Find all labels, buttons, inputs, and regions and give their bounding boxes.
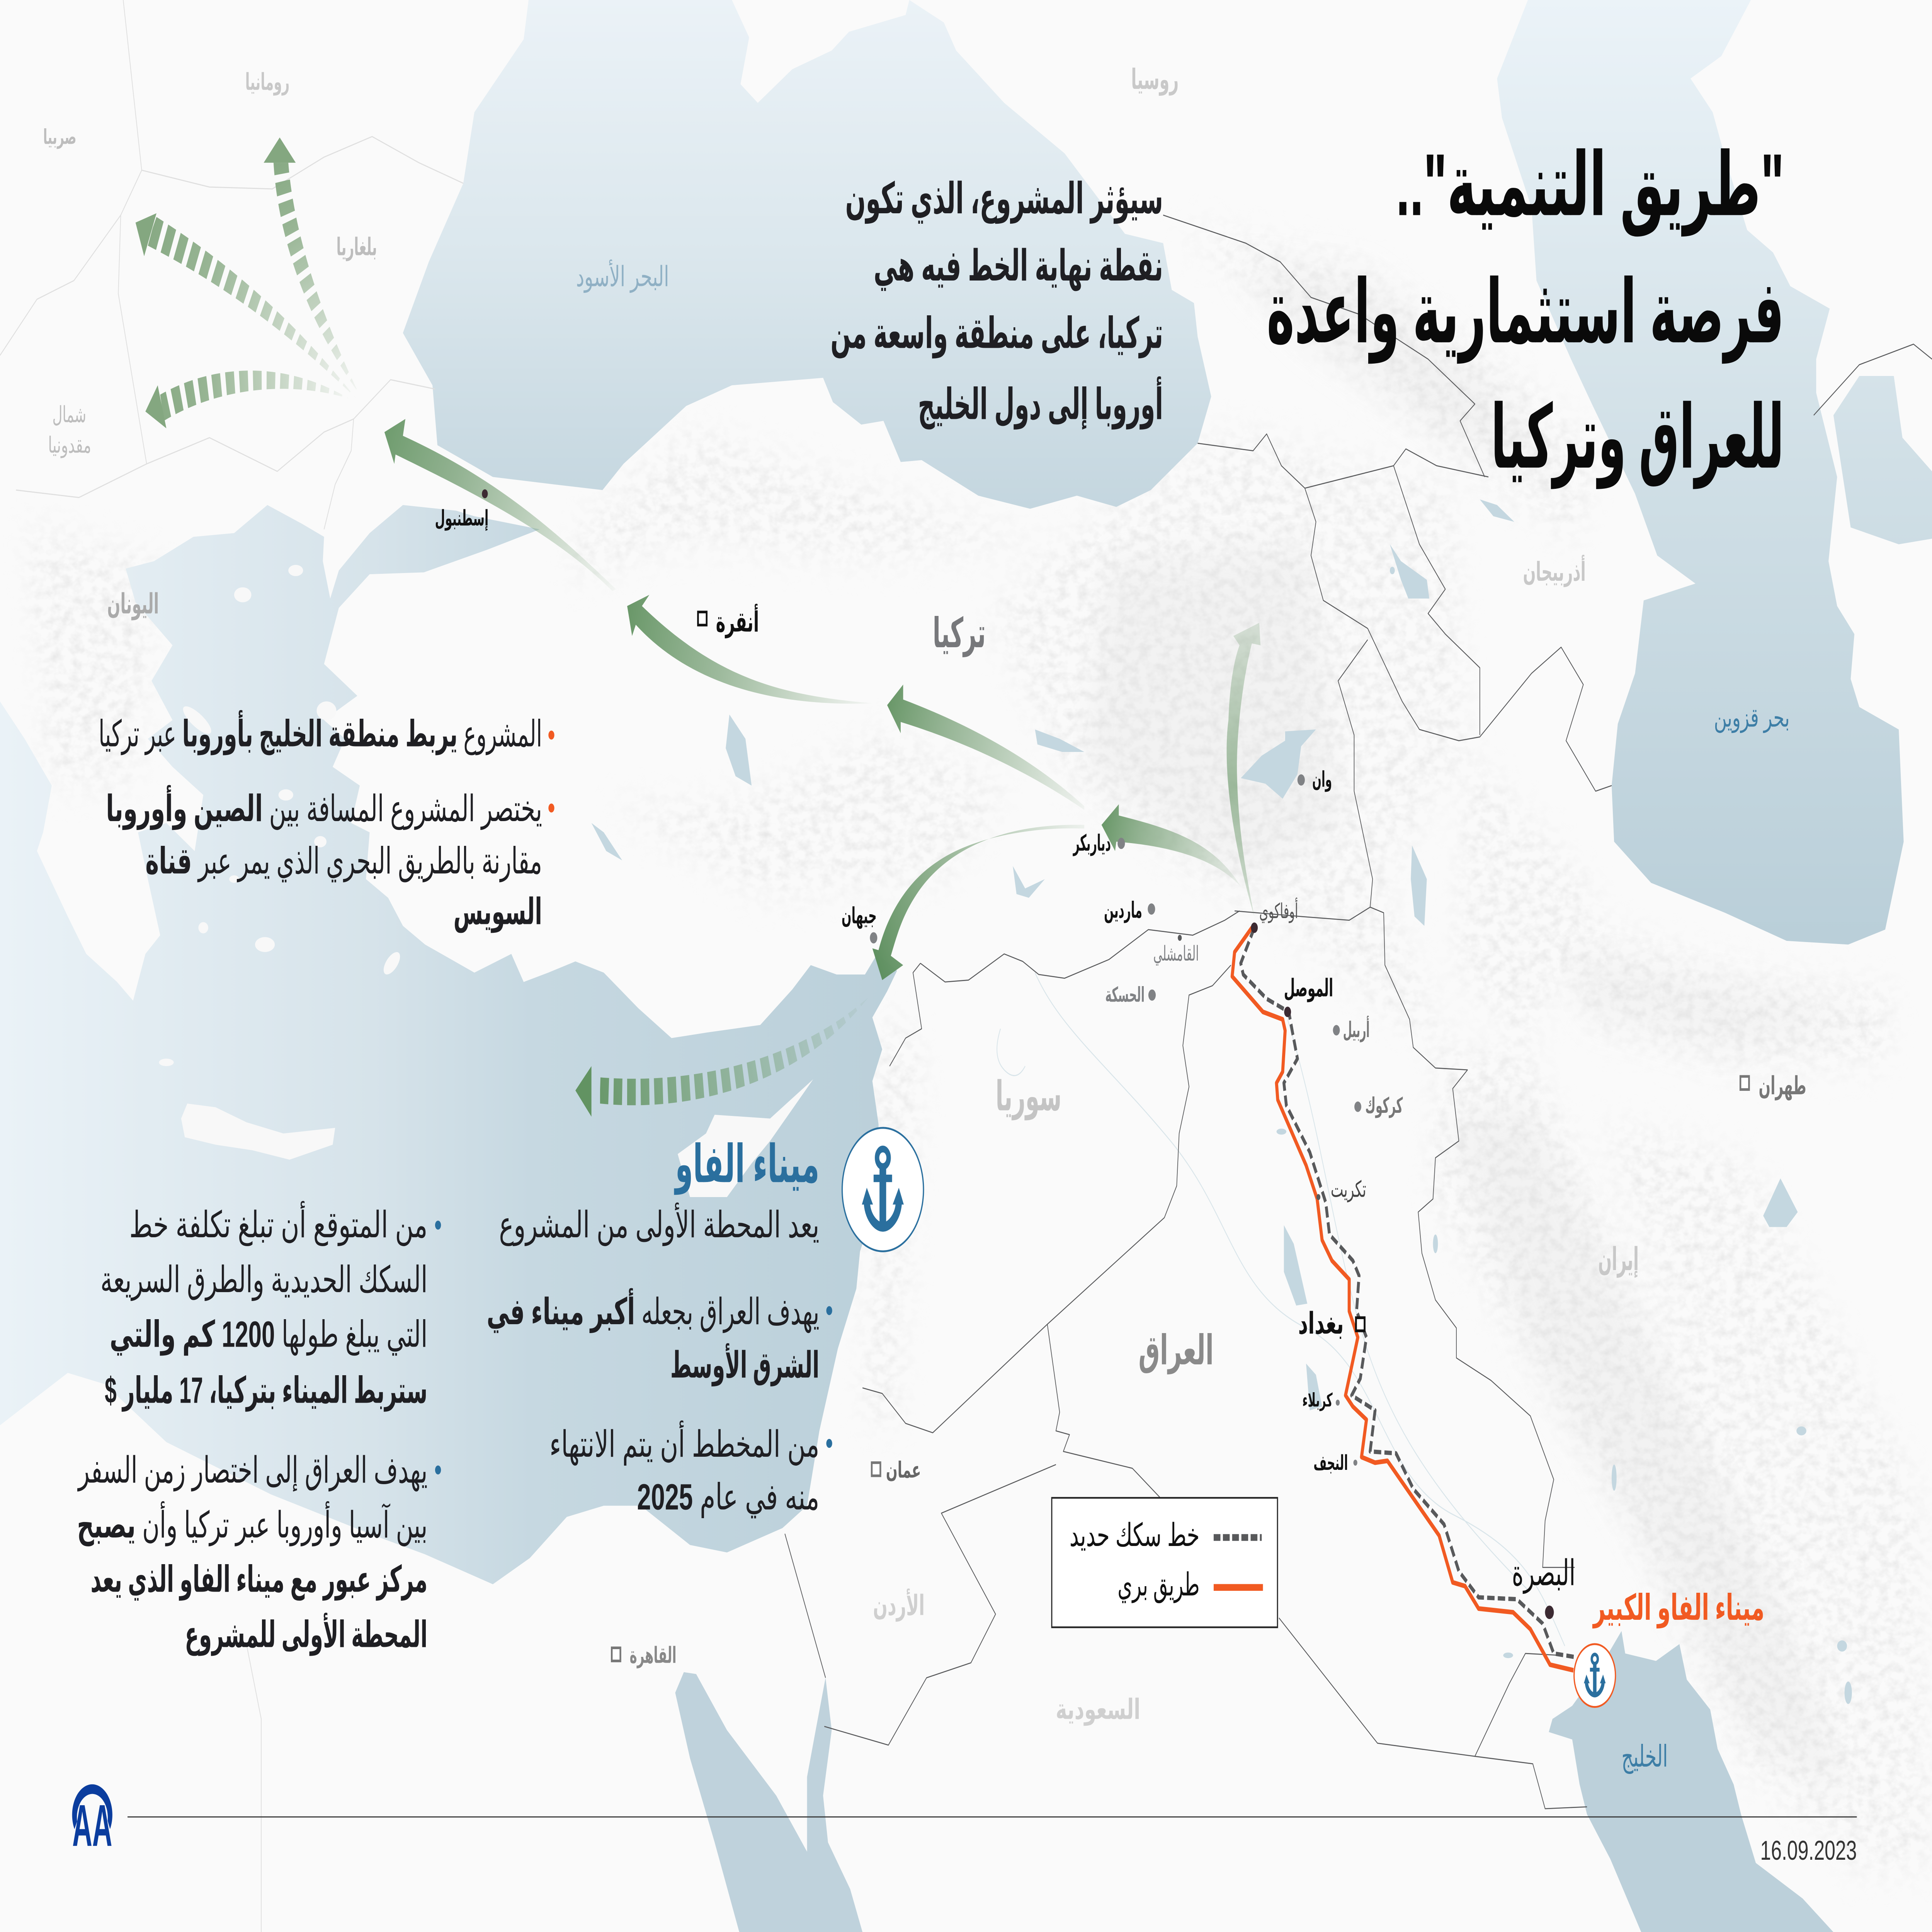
label: Iraq: العراق bbox=[1138, 1328, 1214, 1374]
text block: Europe link bullets: المشروع يربط منطقة الخليج بأوروبا عبر تركيا bbox=[99, 710, 542, 755]
city: Mardin: ماردين bbox=[1104, 898, 1142, 923]
label: North Macedonia: شمال bbox=[53, 402, 86, 427]
city: Istanbul bbox=[435, 489, 488, 531]
text block: cost and transit bullets: ستربط الميناء بتركيا، 17 مليار $ bbox=[105, 1370, 428, 1412]
sea: Persian Gulf bbox=[1549, 1631, 1833, 1932]
city: Mosul bbox=[1284, 975, 1333, 1017]
date: 16.09.2023 bbox=[1760, 1835, 1857, 1866]
label: Greece: اليونان bbox=[107, 588, 159, 620]
arrow: Ovakoy to north bbox=[1227, 623, 1260, 917]
text block: Europe link bullets: السويس bbox=[453, 891, 542, 933]
text block: Faw port facts: يهدف العراق بجعله أكبر ميناء في bbox=[487, 1288, 820, 1333]
text block: Turkey impact: نقطة نهاية الخط فيه هي bbox=[874, 242, 1163, 291]
footer rule bbox=[128, 1816, 1857, 1817]
arrow: to North Macedonia bbox=[145, 371, 349, 429]
city: Amman: عمان bbox=[886, 1458, 921, 1483]
heading: Faw port: ميناء الفاو bbox=[674, 1135, 820, 1196]
city: Amman bbox=[872, 1458, 921, 1483]
text block: cost and transit bullets bbox=[77, 1201, 441, 1656]
label: Saudi Arabia: السعودية bbox=[1056, 1694, 1140, 1726]
city: Kirkuk: كركوك bbox=[1365, 1093, 1403, 1118]
city: Tikrit bbox=[1316, 1177, 1366, 1202]
city: Erbil: أربيل bbox=[1343, 1016, 1370, 1042]
city: Istanbul: إسطنبول bbox=[435, 506, 488, 531]
text block: cost and transit bullets: التي يبلغ طولها 1200 كم والتي bbox=[110, 1314, 428, 1356]
arrow: Diyarbakir to Ceyhan bbox=[872, 825, 1084, 980]
label: Romania: رومانيا bbox=[245, 69, 289, 96]
legend: road: طريق بري bbox=[1117, 1567, 1200, 1603]
sea: Caspian bbox=[1497, 0, 1932, 945]
logo: Anadolu Agency bbox=[72, 1784, 112, 1859]
sea: Mediterranean bbox=[0, 505, 897, 1584]
island: Cyprus bbox=[678, 1079, 813, 1197]
label: Azerbaijan: أذربيجان bbox=[1523, 555, 1586, 587]
city: Cairo: القاهرة bbox=[629, 1643, 677, 1668]
text block: cost and transit bullets: من المتوقع أن تبلغ تكلفة خط bbox=[129, 1201, 428, 1247]
logo: Anadolu Agency: AA bbox=[72, 1793, 112, 1859]
city: Basra: البصرة bbox=[1512, 1553, 1575, 1594]
label: Syria: سوريا bbox=[996, 1073, 1061, 1120]
text block: Faw port facts: الشرق الأوسط bbox=[670, 1343, 820, 1387]
label: Serbia: صربيا bbox=[43, 125, 77, 149]
city: Najaf: النجف bbox=[1313, 1451, 1348, 1475]
title bbox=[1267, 136, 1784, 489]
text block: Turkey impact bbox=[830, 174, 1163, 429]
city: Ovakoy: أوفاكوي bbox=[1259, 898, 1298, 923]
icon: Faw port anchor bbox=[842, 1128, 923, 1251]
city: Ankara: أنقرة bbox=[716, 604, 759, 638]
label: North Macedonia: مقدونيا bbox=[48, 432, 91, 458]
city: Tikrit: تكريت bbox=[1331, 1177, 1366, 1202]
railway route line bbox=[1241, 928, 1576, 1657]
city: Baghdad: بغداد bbox=[1298, 1307, 1344, 1340]
title: للعراق وتركيا bbox=[1491, 388, 1784, 489]
city: Van bbox=[1298, 767, 1332, 792]
label: Gulf: الخليج bbox=[1621, 1740, 1668, 1774]
label: Jordan: الأردن bbox=[873, 1588, 925, 1622]
city: Tehran: طهران bbox=[1759, 1071, 1806, 1100]
arrow: central Turkey to Ankara bbox=[627, 595, 872, 704]
text block: Faw port facts: من المخطط أن يتم الانتهاء bbox=[549, 1420, 820, 1466]
icon: small Faw port anchor bbox=[1574, 1644, 1616, 1707]
city: Mosul: الموصل bbox=[1284, 975, 1333, 1002]
text block: cost and transit bullets: السكك الحديدية والطرق السريعة bbox=[100, 1259, 428, 1301]
legend box bbox=[1052, 1498, 1277, 1627]
city: Cairo bbox=[612, 1643, 677, 1668]
label: North Macedonia bbox=[48, 402, 91, 458]
text block: Turkey impact: سيؤثر المشروع، الذي تكون bbox=[845, 174, 1163, 224]
city: Diyarbakir: دياربكر bbox=[1073, 831, 1111, 856]
text block: Faw port facts bbox=[487, 1202, 832, 1519]
text block: cost and transit bullets: مركز عبور مع ميناء الفاو الذي يعد bbox=[90, 1559, 428, 1601]
title: فرصة استثمارية واعدة bbox=[1267, 263, 1784, 364]
label: Iran: إيران bbox=[1598, 1241, 1639, 1278]
text block: Europe link bullets: يختصر المشروع المسافة بين الصين وأوروبا bbox=[106, 785, 542, 830]
country borders bbox=[785, 215, 1932, 1809]
text block: cost and transit bullets: يهدف العراق إلى اختصار زمن السفر bbox=[77, 1450, 428, 1492]
text block: Turkey impact: أوروبا إلى دول الخليج bbox=[918, 376, 1163, 429]
city: Ankara bbox=[698, 604, 759, 638]
city: Ceyhan bbox=[842, 903, 877, 944]
city: Erbil bbox=[1333, 1016, 1370, 1042]
arrow: Ankara to Istanbul bbox=[384, 419, 616, 591]
city: Ceyhan: جيهان bbox=[842, 903, 877, 929]
city: Hasakah: الحسكة bbox=[1105, 983, 1145, 1006]
label: Bulgaria: بلغاريا bbox=[337, 234, 377, 261]
text block: Europe link bullets: مقارنة بالطريق البحري الذي يمر عبر قناة bbox=[145, 841, 542, 883]
city: Qamishli: القامشلي bbox=[1153, 942, 1199, 966]
label: Black Sea: البحر الأسود bbox=[576, 259, 669, 293]
island: Crete bbox=[181, 1104, 335, 1160]
label: Russia: روسيا bbox=[1131, 64, 1179, 96]
arrow: to Romania bbox=[264, 138, 359, 393]
city: Karbala: كربلاء bbox=[1303, 1389, 1333, 1411]
text block: Faw port facts: منه في عام 2025 bbox=[637, 1476, 820, 1519]
text block: cost and transit bullets: المحطة الأولى للمشروع bbox=[185, 1612, 428, 1656]
lakes and rivers bbox=[592, 499, 1852, 1704]
city: Basra bbox=[1512, 1553, 1575, 1619]
city: Qamishli bbox=[1153, 935, 1199, 966]
label: Caspian Sea: بحر قزوين bbox=[1714, 703, 1790, 733]
city: Van: وان bbox=[1312, 767, 1332, 792]
arrow: Diyarbakir to central Turkey bbox=[887, 685, 1084, 810]
islands bbox=[159, 565, 813, 1197]
label: Grand Faw Port: ميناء الفاو الكبير bbox=[1592, 1588, 1764, 1628]
city: Kirkuk bbox=[1354, 1093, 1403, 1118]
terrain shading bbox=[1084, 262, 1873, 1796]
text block: cost and transit bullets: بين آسيا وأوروبا عبر تركيا وأن يصبح bbox=[77, 1501, 428, 1547]
label: Turkey: تركيا bbox=[933, 610, 986, 657]
text block: Europe link bullets bbox=[99, 710, 554, 933]
sea: Red Sea gulfs bbox=[675, 1672, 862, 1932]
title: "طريق التنمية".. bbox=[1396, 136, 1784, 237]
city: Ovakoy bbox=[1251, 898, 1298, 933]
arrow: Ovakoy to Diyarbakir bbox=[1102, 804, 1241, 886]
sea: Black Sea bbox=[403, 0, 1211, 509]
arrow: to Serbia bbox=[136, 213, 356, 398]
city: Tehran bbox=[1740, 1071, 1806, 1100]
text block: Faw port facts: يعد المحطة الأولى من المشروع bbox=[499, 1202, 820, 1247]
legend: railway: خط سكك حديد bbox=[1070, 1517, 1200, 1553]
arrow: Mediterranean dashed route bbox=[575, 997, 869, 1117]
road route line bbox=[1232, 928, 1573, 1670]
text block: Turkey impact: تركيا، على منطقة واسعة من bbox=[830, 309, 1163, 359]
